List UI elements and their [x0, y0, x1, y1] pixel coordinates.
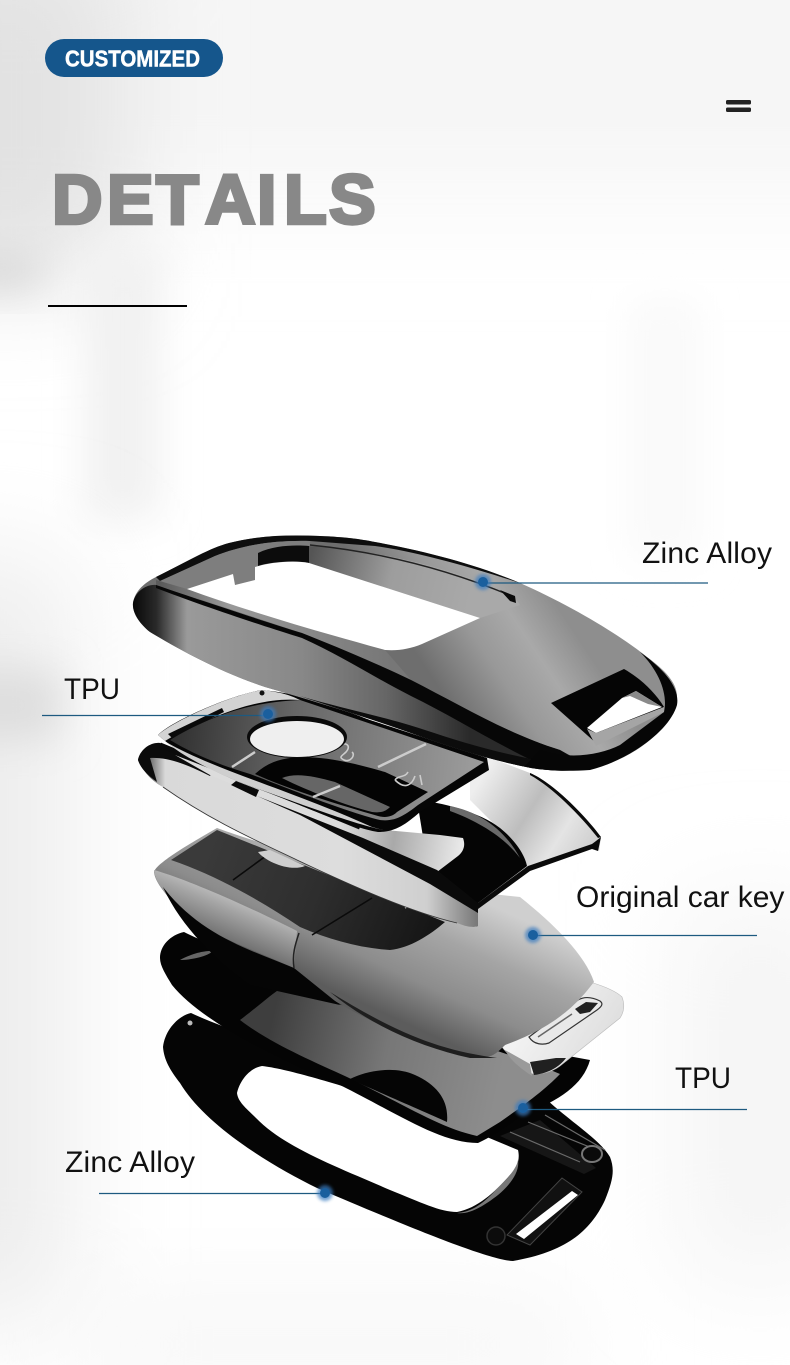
- dot marker: [475, 574, 491, 590]
- product: chrome TPU shell: [138, 743, 601, 927]
- badge: CUSTOMIZED: [45, 39, 223, 77]
- key buttons: [171, 830, 445, 950]
- opening in plate: [255, 757, 428, 817]
- label: Zinc Alloy (bottom): Zinc Alloy: [65, 1146, 195, 1179]
- key slot: [551, 669, 664, 743]
- label: TPU (upper): TPU: [64, 673, 120, 706]
- key ring: [502, 982, 624, 1076]
- key underside: [163, 887, 340, 1005]
- key body: [154, 828, 594, 1057]
- black rim under plate: [160, 745, 360, 827]
- black band lower: [300, 696, 590, 771]
- label: Original car key: [525, 881, 784, 943]
- upper rim left: [160, 541, 310, 589]
- icon: equals sign: [726, 100, 751, 112]
- left black tip: [138, 743, 215, 782]
- notch: [231, 781, 259, 797]
- frame silhouette: [133, 536, 677, 771]
- dot marker: [317, 1185, 333, 1201]
- leader line: [42, 714, 268, 716]
- label: Original car key: Original car key: [576, 881, 784, 914]
- side face: [133, 585, 593, 771]
- badge: CUSTOMIZED: CUSTOMIZED: [65, 46, 200, 72]
- window rim: [309, 546, 520, 618]
- top rim left: [156, 580, 411, 680]
- dot marker: [515, 1100, 531, 1116]
- product: top zinc alloy frame: [133, 536, 677, 771]
- window: [187, 562, 480, 650]
- black right edge: [525, 652, 677, 771]
- product: lower TPU shell: [160, 932, 590, 1143]
- black upper edge: [156, 536, 520, 583]
- fine lower edge: [163, 787, 457, 923]
- top groove: [310, 545, 514, 597]
- black inner band: [417, 800, 527, 927]
- leader line: [483, 582, 708, 584]
- key left side: [154, 870, 297, 968]
- lower chrome strip: [138, 743, 478, 927]
- product: bottom zinc alloy frame: [163, 1013, 613, 1261]
- upper chrome panel: [175, 755, 464, 872]
- black band upper: [156, 585, 590, 768]
- label: Zinc Alloy (top): Zinc Alloy: [642, 537, 772, 570]
- label: TPU (upper): [42, 673, 276, 722]
- product: original car key: [154, 828, 624, 1076]
- dot marker: [525, 927, 541, 943]
- title: DETAILS: DETAILS: [52, 160, 376, 238]
- chrome tail: [470, 750, 601, 905]
- label: Zinc Alloy (bottom): [65, 1146, 333, 1201]
- label: Zinc Alloy (top): [475, 537, 772, 590]
- label: TPU (lower): TPU: [675, 1062, 731, 1095]
- dot marker: [260, 706, 276, 722]
- leader line: [99, 1192, 325, 1194]
- leader line: [533, 934, 757, 936]
- label: TPU (lower): [515, 1062, 747, 1116]
- leader line: [523, 1108, 747, 1110]
- round opening: [247, 716, 347, 758]
- black strip to the tip: [257, 796, 478, 913]
- title underline: [48, 305, 187, 307]
- product: TPU button plate: [158, 690, 489, 832]
